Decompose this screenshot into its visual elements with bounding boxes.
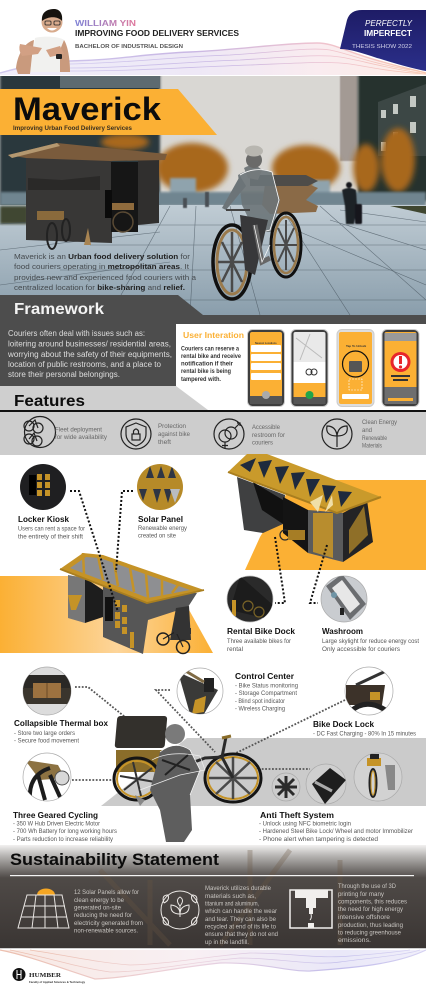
- text: solar: 12 Solar Panels allow for: [74, 890, 139, 896]
- framework text: location of public restrooms, and a place to: [8, 360, 162, 369]
- Humber logo: Faculty of Applied Sciences & Technology: [29, 980, 85, 984]
- text: materials: titanium and aluminum,: [205, 902, 259, 908]
- Humber logo: HUMBER: [29, 973, 62, 979]
- text: materials: up in the landfill.: [205, 940, 249, 946]
- text: restroom: [252, 425, 285, 446]
- callout: control center: Control Center: [235, 672, 294, 681]
- text: 3D printing: printing for many: [338, 892, 384, 898]
- framework heading: Framework: [14, 301, 104, 318]
- text: clean energy: Renewable: [362, 436, 388, 442]
- callout: control center: - Bike Status monitoring: [235, 684, 298, 690]
- text: protection: Protection: [158, 424, 186, 430]
- panel: user interaction: [176, 324, 426, 410]
- footer contour wave: [0, 948, 426, 979]
- panel: sustainability statement: [0, 845, 426, 948]
- intro text: Maverick is an Urban food delivery solution for: [14, 252, 191, 261]
- user interaction text: Couriers can reserve a: [181, 346, 239, 352]
- text: 3D printing: Through the use of 3D: [338, 884, 397, 890]
- callout: bike dock lock: Bike Dock Lock: [313, 720, 375, 729]
- intro text: food couriers operating in metropolitan areas . It: [14, 262, 189, 271]
- callout: rental bike dock: Rental Bike Dock: [227, 627, 296, 636]
- callout: washroom: Only accessible for couriers: [322, 647, 400, 653]
- callout: control center: [177, 668, 298, 714]
- panel: header: [0, 0, 426, 76]
- text: 3D printing: emissions.: [338, 938, 371, 944]
- text: solar: electricity generated from: [74, 921, 143, 927]
- callout: solar panel: Solar Panel: [138, 515, 183, 524]
- thesis show badge: THESIS SHOW 2022: [352, 44, 412, 50]
- text: 3D printing: components, this reduces: [338, 900, 407, 906]
- callout: control center: - Blind spot indicator: [235, 699, 285, 705]
- callout: three geared cycling: Three Geared Cycling: [13, 811, 98, 820]
- program line: BACHELOR OF INDUSTRIAL DESIGN: [75, 44, 183, 50]
- text: solar: non-renewable sources.: [74, 928, 138, 934]
- phone: locations list: Nearest Locations: [255, 342, 277, 345]
- text: materials: ensure that they do not end: [205, 932, 278, 938]
- user interaction text: [181, 346, 241, 383]
- header contour wave: [0, 43, 426, 75]
- phone: tamper alert: [382, 330, 419, 406]
- user interaction text: rental bike and receive: [181, 353, 241, 360]
- callout: control center: - Wireless Charging: [235, 706, 285, 712]
- text: materials: recycled at end of its life to: [205, 924, 277, 930]
- Humber logo: [12, 968, 85, 984]
- text: protection: theft: [158, 440, 171, 446]
- icon: circular leaves: [161, 891, 199, 929]
- grey backdrop: [101, 738, 426, 806]
- phone: locations list: [248, 330, 284, 406]
- text: materials: and tear. They can also be: [205, 917, 277, 923]
- framework text: store their personal belongings.: [8, 370, 120, 379]
- panel: bike features: [13, 667, 426, 843]
- text: fleet: for wide availability: [55, 435, 107, 441]
- callout: solar panel: Renewable energy: [138, 526, 187, 532]
- user interaction text: rental bike is being: [181, 368, 231, 375]
- callout: anti theft system: - Phone alert when tampering is detected: [259, 837, 378, 843]
- panel: feature highlights band: [0, 412, 426, 455]
- text: 3D printing: the need for high energy: [338, 907, 403, 913]
- text: clean energy: Clean Energy: [362, 420, 397, 426]
- callout: three geared cycling: - 350 W Hub Driven Electric Motor: [13, 822, 100, 828]
- text: 3D printing: [338, 884, 407, 944]
- icon: sprout: [322, 419, 352, 449]
- bike render with courier: [114, 716, 261, 842]
- callout: anti theft system: - Hardened Steel Bike Lock/ Wheel and motor Immobilizer: [259, 829, 413, 835]
- portrait of William Yin: [16, 9, 70, 74]
- text: restroom: couriers: [252, 440, 273, 446]
- title banner: Improving Urban Food Delivery Services: [13, 125, 132, 132]
- text: 3D printing: production, thus leading: [338, 923, 403, 929]
- intro text: centralized location for bike-sharing and relief.: [14, 283, 185, 292]
- phone: tap to unlock: [337, 330, 374, 406]
- kiosk render: rear view: [228, 454, 381, 562]
- text: clean energy: Materials: [362, 444, 382, 450]
- leader lines: [72, 687, 345, 780]
- intro text: provides new and experienced food couriers with a: [14, 273, 197, 282]
- callout: collapsible thermal box: Collapsible Thermal box: [14, 719, 109, 728]
- callout: locker kiosk: Locker Kiosk: [18, 515, 70, 524]
- text: restroom: restroom for: [252, 433, 285, 439]
- callout: collapsible thermal box: - Secure food movement: [14, 738, 79, 744]
- panel: features heading: [0, 386, 426, 412]
- person with luggage: [342, 182, 362, 224]
- text: clean energy: [362, 420, 397, 450]
- callout: three geared cycling: - 700 Wh Battery for long working hours: [13, 829, 117, 835]
- callout: anti theft system: [259, 753, 413, 843]
- kiosk render: front view: [60, 553, 204, 654]
- callout: locker kiosk: the entirety of their shift: [18, 534, 83, 540]
- callout: collapsible thermal box: [14, 667, 109, 744]
- text: 3D printing: intensive offshore: [338, 915, 391, 921]
- text: protection: against bike: [158, 432, 191, 438]
- callout: rental bike dock: Three available bikes for: [227, 639, 291, 645]
- text: fleet: Fleet deployment: [55, 428, 102, 434]
- thesis show badge: IMPERFECT: [364, 29, 412, 38]
- text: restroom: Accessible: [252, 425, 281, 431]
- callout: collapsible thermal box: - Store two large orders: [14, 731, 75, 737]
- callout: washroom: Large skylight for reduce energy cost: [322, 639, 419, 645]
- icon: shield lock: [121, 419, 151, 449]
- panel: framework: [0, 295, 426, 386]
- thesis show badge: [340, 10, 426, 71]
- user interaction heading: User Interation: [183, 331, 244, 340]
- callout: locker kiosk: Users can rent a space for: [18, 526, 85, 532]
- callout: solar panel: created on site: [138, 534, 177, 540]
- text: materials: materials such as,: [205, 894, 256, 900]
- callout: washroom: [310, 545, 419, 653]
- kiosk in scene: [8, 143, 167, 249]
- callout: rental bike dock: rental: [227, 647, 243, 653]
- user interaction text: tampered with.: [181, 376, 221, 383]
- text: solar: [74, 890, 143, 934]
- text: materials: which can handle the wear: [204, 909, 277, 915]
- icon: gender restroom: [214, 419, 244, 449]
- project heading: IMPROVING FOOD DELIVERY SERVICES: [75, 28, 239, 38]
- icon: solar panel: [18, 888, 69, 928]
- framework text: Couriers often deal with issues such as:: [8, 329, 145, 338]
- user interaction text: notification if their: [181, 360, 234, 368]
- text: clean energy: and: [362, 428, 372, 434]
- phone: map: [291, 330, 328, 406]
- student name: WILLIAM YIN: [75, 18, 136, 28]
- callout: three geared cycling: [13, 753, 117, 843]
- orange backdrop: left: [0, 576, 213, 653]
- callout: control center: - Storage Compartment: [235, 691, 297, 697]
- panel: features heading: Features: [14, 393, 85, 410]
- panel: hero scene: [0, 70, 426, 315]
- callout: three geared cycling: - Parts reduction to increase reliability: [13, 837, 113, 843]
- text: solar: generated on-site: [74, 906, 122, 912]
- callout: washroom: Washroom: [322, 627, 363, 636]
- phone: tap to unlock: Tap To Unlock: [346, 344, 367, 348]
- cyclist on Maverick bike: [213, 146, 318, 299]
- panel: kiosk features: [0, 454, 426, 654]
- text: solar: reducing the need for: [74, 913, 132, 919]
- callout: anti theft system: Anti Theft System: [260, 811, 334, 820]
- text: fleet: [55, 428, 107, 441]
- callout: locker kiosk: [18, 464, 118, 612]
- text: solar: clean energy to be: [74, 898, 125, 904]
- framework text: worrying about the safety of their equipments,: [7, 350, 172, 359]
- title banner: [0, 89, 217, 135]
- callout: solar panel: [116, 464, 187, 572]
- text: protection: [158, 424, 191, 446]
- city background: [0, 70, 426, 315]
- icon: bikes: [24, 416, 56, 448]
- sustainability heading: Sustainability Statement: [10, 850, 219, 869]
- thesis show badge: PERFECTLY: [365, 19, 413, 28]
- callout: rental bike dock: [227, 537, 296, 653]
- orange backdrop: right: [245, 480, 426, 570]
- text: 3D printing: to reducing greenhouse: [338, 930, 402, 936]
- callout: bike dock lock: - DC Fast Charging - 80% In 15 minutes: [313, 732, 416, 738]
- framework text: loitering around businesses/ residential areas,: [8, 340, 171, 348]
- intro text: [14, 252, 197, 292]
- callout: anti theft system: - Unlock using NFC biometric login: [259, 822, 351, 828]
- text: materials: Maverick utilizes durable: [205, 886, 272, 892]
- framework text: [7, 329, 172, 379]
- icon: 3D printer: [290, 890, 332, 928]
- callout: bike dock lock: [313, 667, 416, 738]
- text: materials: [204, 886, 278, 946]
- title banner: Maverick: [13, 91, 161, 127]
